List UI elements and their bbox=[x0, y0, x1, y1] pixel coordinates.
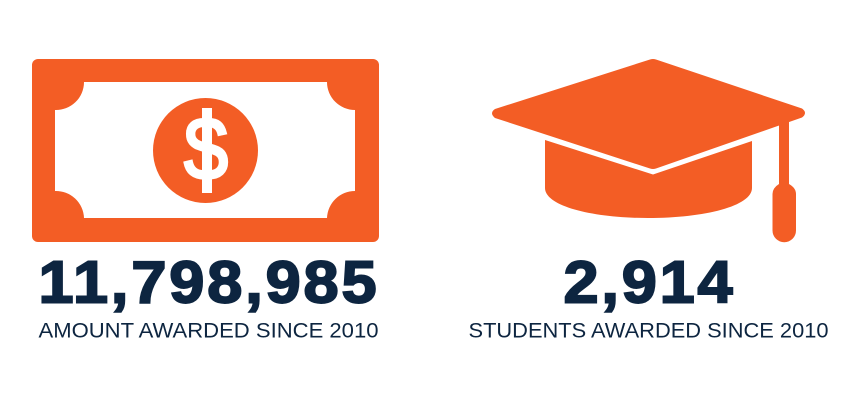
amount label: AMOUNT AWARDED SINCE 2010 bbox=[38, 318, 379, 342]
icon: dollar bill bbox=[32, 59, 379, 242]
amount value: 11,798,985 bbox=[38, 249, 377, 315]
students value: 2,914 bbox=[564, 249, 733, 315]
icon: graduation cap bbox=[492, 59, 805, 242]
icon: dollar bill: $ bbox=[184, 99, 228, 198]
students label: STUDENTS AWARDED SINCE 2010 bbox=[468, 318, 829, 342]
